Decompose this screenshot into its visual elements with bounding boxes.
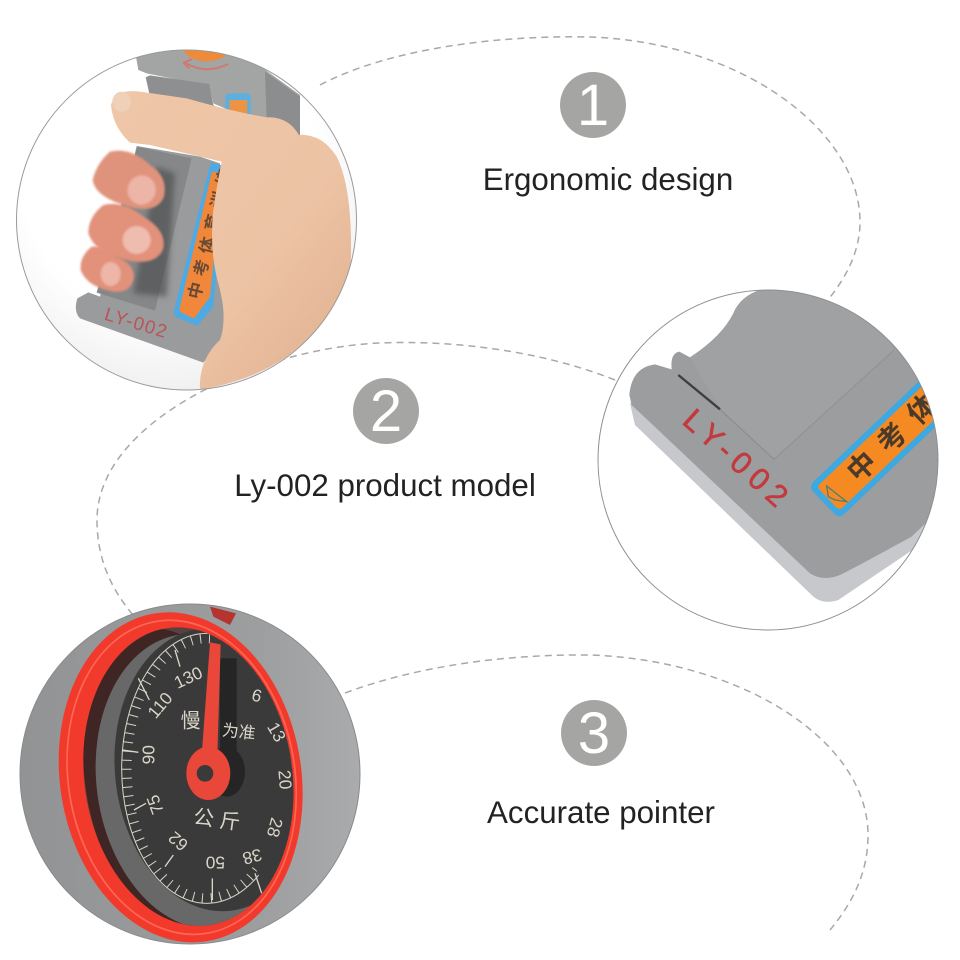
number badge 1 [560,72,626,138]
heading: Ly-002 product model: Ly-002 product model [234,468,536,503]
blue label strip [174,162,221,326]
small label orange [229,100,248,114]
red arrow [183,59,228,69]
lever [146,75,216,106]
dial numbers: 13 [263,719,290,745]
grip groove [97,147,192,311]
label characters: 中考体 [841,379,954,489]
inner tick mask [132,643,282,893]
grey bezel [96,634,294,926]
number badge 1: 1 [577,73,609,138]
needle shadow [220,658,237,765]
minor ticks ring [127,638,287,898]
index finger [93,151,165,209]
dial numbers: 28 [263,816,287,839]
orange dial [184,50,226,62]
dial numbers: 75 [142,792,168,817]
number badge 2: 2 [370,379,402,444]
dial numbers: 38 [240,844,264,869]
dial numbers: 50 [206,853,225,873]
middle finger [88,204,164,262]
dial numbers: 62 [164,828,192,855]
photo circle: accurate pointer dial [20,595,360,960]
major ticks [123,650,262,900]
dial numbers: 110 [143,688,176,722]
window [83,627,294,926]
photo circle: hand gripping dynamometer [16,31,356,390]
logo on label [827,486,847,502]
needle hub [186,747,230,800]
model text: LY-002 [102,303,170,342]
dial numbers: 慢 [181,710,201,733]
dashed connector: curve 3 [345,655,868,930]
blue label [811,382,934,516]
device head [136,43,300,137]
dial numbers: 20 [274,769,296,790]
number badge 2 [353,378,419,444]
small label [225,93,251,114]
red ring [58,612,303,942]
label characters: 中考体育训练 [184,166,236,301]
dashed connector: curve 1 [320,37,860,302]
number badge 3: 3 [578,701,610,766]
recess left edge [720,409,774,459]
dark bezel crescent [83,629,192,926]
device side wall [630,403,925,602]
red logo mark [210,607,236,625]
dial numbers [138,662,296,873]
device side edge [265,72,300,135]
dial numbers: 公 斤 [192,806,242,835]
slit shadow [678,375,720,409]
device body [76,146,227,363]
blank right dial sector [210,628,310,928]
heading: Ergonomic design: Ergonomic design [483,162,733,197]
needle [202,642,221,755]
device top face [629,287,957,578]
dial numbers: 90 [138,745,158,764]
hub shadow [208,747,245,797]
dashed connector: curve 2 [97,342,615,615]
photo circle: LY-002 model close-up [598,287,960,630]
ring finger [81,246,134,292]
orange label strip [180,172,223,319]
recessed panel [690,291,757,358]
scale arc [122,633,292,903]
finger shadows [133,167,175,297]
orange label fill [818,387,933,509]
dial face [114,630,294,912]
ring highlight [66,619,298,936]
number badge 3 [561,700,627,766]
recess edge [774,351,893,459]
dial numbers: 130 [171,662,206,693]
dial numbers: 为准 [221,721,256,743]
hub pin [197,765,213,782]
hand and thumb [111,91,351,390]
dial numbers: 6 [250,685,264,706]
model text: LY-002 [676,403,794,514]
thumb nail [112,92,131,112]
heading: Accurate pointer: Accurate pointer [487,795,715,830]
